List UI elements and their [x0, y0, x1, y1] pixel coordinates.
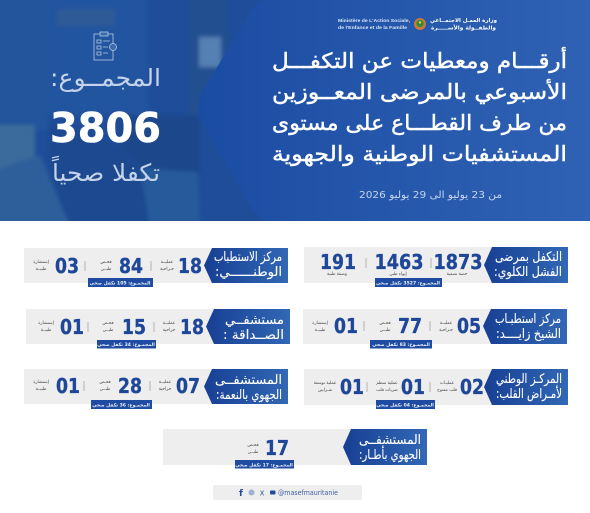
- metric: 1463: 1463: [374, 250, 424, 274]
- icon: facebook: f: [239, 489, 243, 499]
- header banner: [0, 0, 590, 226]
- metric: 15: [102, 315, 146, 339]
- title: [272, 47, 567, 166]
- metric: 18: 18: [178, 254, 202, 278]
- metric: 01: [312, 314, 358, 338]
- title: الأسبوعي بالمرضى المعــوزين: [272, 79, 567, 104]
- total tag: [376, 400, 435, 409]
- metric: 05: جـراحية: [439, 328, 453, 333]
- panel: Atar regional hospital: [163, 429, 427, 468]
- metric: 01: إستشارة: [312, 321, 328, 326]
- metric: 05: [439, 314, 481, 338]
- metric: 01: 01: [334, 314, 358, 338]
- metric: 03: إستشارة: [33, 260, 49, 265]
- ministry logo and names: de l'Enfance et de la Famille: [338, 25, 407, 30]
- panel: cardiology centre: [304, 369, 568, 409]
- panel heading: [496, 372, 562, 402]
- panel heading: لأمـراض القلب:: [496, 385, 562, 402]
- total tag: [91, 400, 152, 409]
- metric: 01: عملية توسعة: [314, 381, 337, 386]
- metric: 03: [33, 254, 79, 278]
- metric: 17: 17: [265, 436, 289, 460]
- metric: 03: طبيــة: [36, 267, 47, 272]
- ministry logo and names: وزارة العمـل الاجتمــاعي: [430, 18, 498, 24]
- metric: 17: طبــي: [248, 450, 259, 455]
- social handle: @masefmauritanie: [278, 489, 338, 497]
- total tag: المجمـوع: 17 تكفل صحي: [235, 462, 293, 468]
- metric: 02: 02: [460, 375, 484, 399]
- metric: 01: إستشارة: [33, 380, 49, 385]
- metric: 77: 77: [398, 314, 422, 338]
- metric: 15: 15: [122, 315, 146, 339]
- metric: 01: طبيــة: [41, 328, 52, 333]
- panel heading: التكفل بمرضى: [495, 250, 562, 265]
- title: من طرف القطـــاع على مستوى: [272, 111, 567, 135]
- panel heading: [223, 313, 284, 343]
- total tag: [375, 278, 442, 287]
- metric: 01: عملية منظم: [376, 381, 398, 386]
- panel heading: مركز الاستطباب: [214, 250, 282, 265]
- metric: 15: طبــي: [103, 328, 114, 333]
- panel: Sheikh Zayed: [303, 309, 567, 348]
- total unit: تكفلا صحياً: [51, 156, 160, 187]
- panel heading: [495, 312, 561, 342]
- panel: Friendship hospital: [26, 309, 290, 348]
- total tag: المجمـوع: 83 تكفل صحي: [372, 342, 430, 348]
- total tag: المجمـوع: 04 تكفل صحي: [376, 402, 434, 408]
- metric: 18: [160, 254, 202, 278]
- total tag: [370, 340, 432, 348]
- icon: x: X: [260, 490, 265, 498]
- metric: 18: 18: [180, 315, 204, 339]
- title: أرقـــام ومعطيات عن التكفـــل: [272, 47, 567, 73]
- metric: 01: [376, 375, 425, 399]
- icon: youtube: [270, 490, 276, 494]
- metric: 17: فحـص: [247, 443, 259, 448]
- icon: clipboard checklist: [94, 32, 116, 60]
- panel heading: [215, 373, 282, 403]
- panel heading: مستشفــي: [225, 313, 284, 328]
- metric: 01: 01: [340, 375, 364, 399]
- metric: 1463: إيواء طبي: [389, 272, 407, 277]
- metric: 01: [38, 315, 84, 339]
- metric: 01: 01: [401, 375, 425, 399]
- metric: 01: 01: [56, 374, 80, 398]
- total tag: المجمـوع: 3527 تكفل صحي: [376, 280, 440, 286]
- hospital photo backdrop: [0, 0, 228, 226]
- metric: 07: [159, 374, 200, 398]
- metric: 84: طبــي: [101, 267, 112, 272]
- total tag: المجمـوع: 105 تكفل صحي: [90, 280, 151, 286]
- panel heading: الشيخ زايــــد:: [496, 327, 561, 342]
- metric: 28: طبــي: [100, 387, 111, 392]
- total number: 3806: [50, 104, 161, 152]
- metric: 03: 03: [55, 254, 79, 278]
- metric: 02: قلب مفتوح: [437, 388, 457, 393]
- metric: 01: طبيــة: [315, 328, 326, 333]
- right blue panel: [198, 0, 590, 221]
- metric: 05: عمليــة: [440, 321, 453, 326]
- ministry logo and names: والطفــولة والأســـــرة: [431, 24, 497, 32]
- metric: 15: فحـص: [102, 321, 114, 326]
- panel: national emergency centre: [24, 248, 288, 287]
- panel heading: الفشل الكلوي:: [494, 265, 562, 280]
- metric: 1873: 1873: [434, 250, 482, 274]
- panel heading: المستشفــى: [215, 373, 282, 388]
- panel: Nema regional hospital: [24, 369, 288, 409]
- metric: 07: جراحية: [159, 387, 172, 392]
- total tag: المجمـوع: 34 تكفل صحي: [97, 342, 155, 348]
- metric: 01: طبيــة: [36, 387, 47, 392]
- metric: 07: 07: [176, 374, 200, 398]
- total label: المجمــوع:: [50, 64, 161, 92]
- metric: 02: عمليـات: [440, 381, 455, 386]
- metric: 02: [437, 375, 484, 399]
- panel heading: الوطنــــــي:: [215, 265, 282, 280]
- panel heading: [359, 433, 421, 463]
- metric: 18: جراحية: [163, 328, 176, 333]
- metric: 01: [33, 374, 80, 398]
- panel heading: [214, 250, 282, 280]
- metric: 18: [163, 315, 204, 339]
- metric: 01: [314, 375, 364, 399]
- metric: 01: شـرايين: [318, 388, 332, 393]
- metric: 84: 84: [119, 254, 143, 278]
- panel heading: مركز استطبـاب: [495, 312, 561, 327]
- metric: 18: عمليــة: [163, 321, 176, 326]
- total tag: المجمـوع: 36 تكفل صحي: [92, 402, 150, 408]
- metric: 01: ضربات قلب: [376, 388, 398, 393]
- metric: 77: طبــي: [380, 328, 391, 333]
- metric: 1873: حصة تصفية: [447, 272, 468, 277]
- metric: 28: 28: [118, 374, 142, 398]
- date range: من 23 يوليو الى 29 يوليو 2026: [359, 190, 502, 201]
- metric: 77: [379, 314, 422, 338]
- metric: 01: إستشارة: [38, 321, 54, 326]
- panel heading: الصــداقة :: [223, 328, 284, 343]
- social media bar: [213, 485, 362, 500]
- metric: 05: 05: [457, 314, 481, 338]
- metric: 84: فحـص: [100, 260, 112, 265]
- panel: kidney failure: [304, 247, 568, 287]
- metric: 07: عمليــة: [159, 380, 172, 385]
- ministry logo and names: Ministère de L'Action Sociale,: [338, 18, 410, 23]
- metric: 18: جـراحية: [160, 267, 174, 272]
- panel heading: الجهوي بأطـار:: [359, 445, 421, 463]
- metric: 84: [100, 254, 143, 278]
- panel heading: [494, 250, 562, 280]
- total tag: [88, 278, 153, 287]
- total tag: [97, 340, 156, 348]
- metric: 28: [99, 374, 142, 398]
- metric: 01: 01: [60, 315, 84, 339]
- metric: 18: عمليــة: [161, 260, 174, 265]
- panel heading: الجهوي بالنعمة:: [216, 388, 282, 403]
- total tag: [235, 460, 294, 468]
- metric: 28: فحـص: [99, 380, 111, 385]
- icon: instagram: [248, 490, 254, 496]
- ministry logo and names: [338, 18, 498, 32]
- panel heading: المركـز الوطني: [496, 372, 562, 387]
- metric: 191: وصفة طبية: [327, 272, 347, 277]
- title: المستشفيات الوطنية والجهوية: [272, 142, 567, 166]
- metric: 77: فحـص: [379, 321, 391, 326]
- metric: 191: 191: [320, 250, 356, 274]
- metric: 17: [247, 436, 289, 460]
- panel heading: المستشفــى: [359, 433, 421, 448]
